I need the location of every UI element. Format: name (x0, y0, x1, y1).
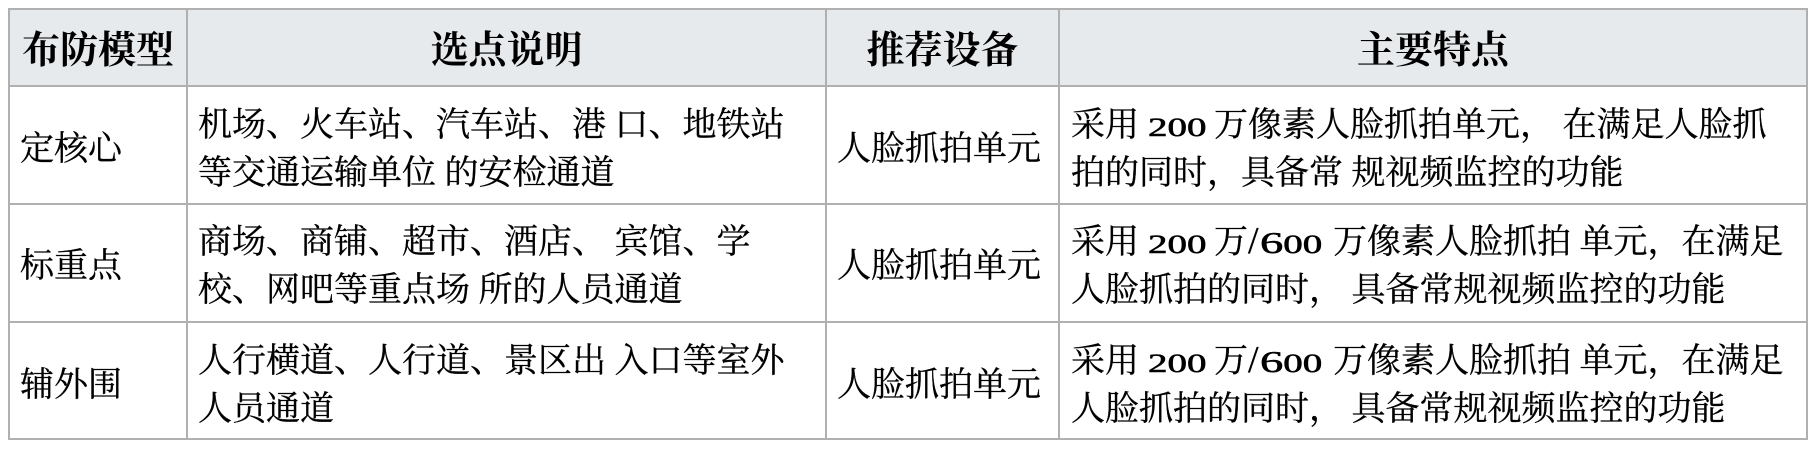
row 3 model: 辅外围 (10, 323, 186, 438)
row 3 recommended device (827, 323, 1058, 438)
row 3 main features: 采用 万/ 万像素人脸抓拍 单元，在满足 (1071, 338, 1784, 380)
header: 推荐设备: 推荐设备 (866, 30, 1018, 72)
row 3 recommended device: 人脸抓拍单元 (837, 366, 1041, 404)
row 1 site description: 等交通运输单位 的安检通道 (198, 154, 614, 192)
row 2 main features: 人脸抓拍的同时， 具备常规视频监控的功能 (1071, 272, 1726, 309)
row 2 main features: 200 (1148, 230, 1206, 259)
row 1 site description (188, 87, 825, 203)
row 1 main features: 采用 万像素人脸抓拍单元， 在满足人脸抓 (1071, 106, 1766, 144)
row 1 recommended device (827, 87, 1058, 203)
header: 布防模型: 布防模型 (22, 30, 174, 72)
row 1 main features (1060, 87, 1806, 203)
row 3 site description: 人行横道、人行道、景区出 入口等室外 (198, 342, 784, 380)
row 3 model: 辅外围: 辅外围 (20, 366, 122, 404)
row 2 model: 标重点: 标重点 (20, 248, 122, 285)
row 3 main features: 600 (1260, 344, 1322, 378)
header: 主要特点: 主要特点 (1357, 30, 1509, 72)
header: 推荐设备 (827, 10, 1058, 85)
row 1 model: 定核心 (10, 87, 186, 203)
row 2 site description (188, 205, 825, 321)
header: 布防模型 (10, 10, 186, 85)
row 2 recommended device (827, 205, 1058, 321)
header: 选点说明 (188, 10, 825, 85)
header: 主要特点 (1060, 10, 1806, 85)
row 2 site description: 校、网吧等重点场 所的人员通道 (198, 272, 682, 309)
row 2 main features: 采用 万/ 万像素人脸抓拍 单元，在满足 (1071, 220, 1784, 262)
row 1 main features: 拍的同时，具备常 规视频监控的功能 (1071, 154, 1624, 192)
row 1 recommended device: 人脸抓拍单元 (837, 130, 1041, 168)
row 2 main features: 600 (1260, 225, 1322, 260)
row 2 model: 标重点 (10, 205, 186, 321)
row 3 site description: 人员通道 (198, 390, 334, 428)
row 3 main features: 200 (1148, 348, 1206, 378)
row 3 main features (1060, 323, 1806, 438)
row 3 main features: 人脸抓拍的同时， 具备常规视频监控的功能 (1071, 390, 1726, 428)
row 1 site description: 机场、火车站、汽车站、港 口、地铁站 (198, 106, 784, 144)
row 3 site description (188, 323, 825, 438)
row 2 main features (1060, 205, 1806, 321)
row 1 main features: 200 (1148, 112, 1206, 142)
row 1 model: 定核心: 定核心 (20, 130, 122, 168)
row 2 site description: 商场、商铺、超市、酒店、 宾馆、学 (198, 224, 750, 261)
row 2 recommended device: 人脸抓拍单元 (837, 248, 1041, 285)
header: 选点说明: 选点说明 (430, 30, 582, 72)
